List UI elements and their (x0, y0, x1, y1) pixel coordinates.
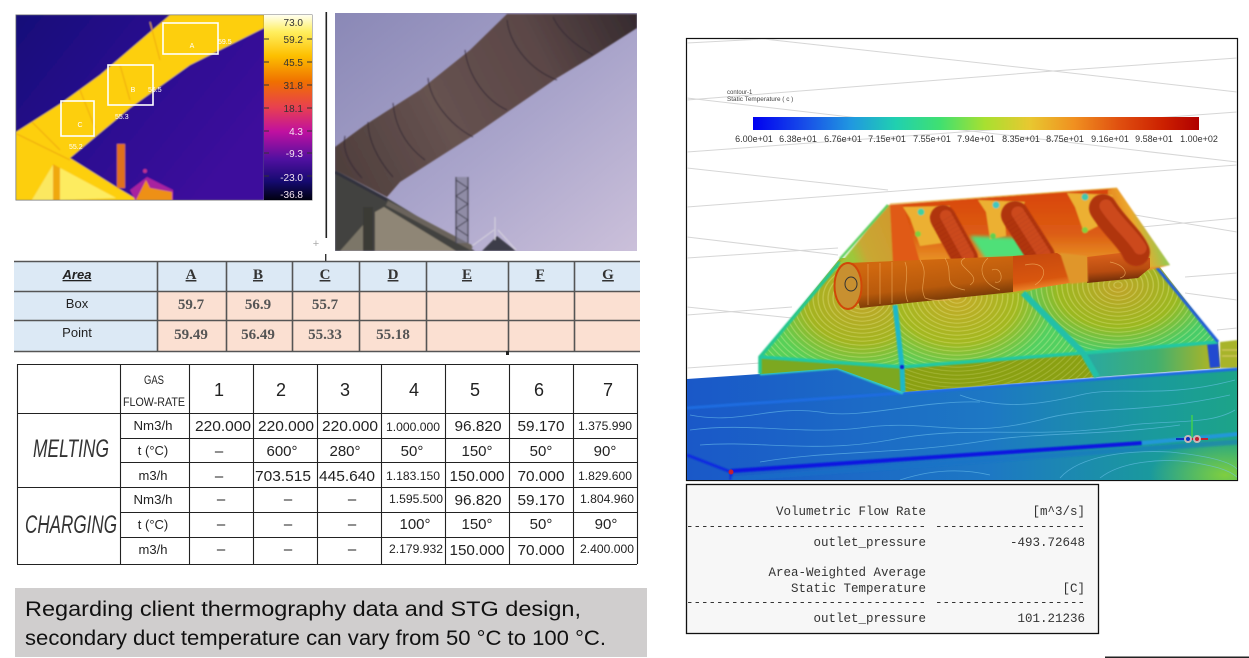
temperature by area table (14, 262, 640, 355)
table 2 header: 2 (276, 380, 286, 400)
row: point: Point (62, 325, 92, 340)
unit labels: Nm3/h (134, 492, 172, 507)
flow values melting: 1.829.600 (578, 469, 632, 483)
measurement box C: C (77, 122, 83, 129)
temperature colour scale: -36.8 (280, 190, 303, 201)
flow values charging: 1.595.500 (389, 492, 443, 506)
table 2 header: FLOW-RATE (123, 395, 185, 409)
solver report panel: -------------------- (935, 596, 1085, 610)
flow values charging: – (348, 516, 357, 533)
table 2 header: 7 (603, 380, 613, 400)
solver report panel: outlet_pressure (813, 612, 926, 626)
row: point: 55.18 (376, 327, 410, 343)
flow values charging (217, 491, 634, 559)
flow values charging: – (348, 541, 357, 558)
temperature colour scale: 59.2 (284, 35, 303, 46)
temperature colour scale: 18.1 (284, 104, 303, 115)
flow values charging: – (217, 541, 226, 558)
lattice tower (456, 177, 468, 243)
solver report panel: [C] (1062, 582, 1085, 596)
solver report panel: -------------------- (935, 520, 1085, 534)
unit labels: t (°C) (138, 517, 168, 532)
measurement box B: B (131, 87, 136, 94)
flow values melting: 150° (461, 443, 493, 460)
solver report panel: Area-Weighted Average (768, 566, 926, 580)
flow values charging: 100° (399, 516, 431, 533)
row: box: 59.7 (178, 297, 205, 313)
vertical divider (326, 12, 327, 238)
flow values melting: 1.000.000 (386, 420, 440, 434)
duct body (335, 14, 637, 197)
row: point (62, 325, 410, 343)
solver report panel: -------------------------------- (686, 596, 926, 610)
table header row: E (462, 267, 472, 283)
solver report panel: 101.21236 (1017, 612, 1085, 626)
flow values melting: 70.000 (518, 468, 564, 485)
axis triad (1176, 415, 1208, 443)
flow values charging: – (284, 516, 293, 533)
flow values charging: – (284, 541, 293, 558)
unit labels: m3/h (139, 542, 167, 557)
hood faces (760, 260, 1218, 367)
table header row: G (602, 267, 614, 283)
temperature colour scale: -23.0 (280, 173, 303, 184)
table 2 header: 5 (470, 380, 480, 400)
flow values charging: 90° (595, 516, 617, 533)
table header row: D (388, 267, 399, 283)
measurement box A: 59.5 (218, 39, 232, 46)
U-bend pipes (943, 213, 1044, 258)
side tab at right edge (1220, 340, 1238, 368)
colour legend: 9.16e+01 (1091, 134, 1129, 144)
measurement box B: 55.3 (115, 114, 129, 121)
flow values charging: – (284, 491, 293, 508)
flow values melting: 1.375.990 (578, 419, 632, 433)
hood structure (760, 258, 1220, 392)
flow values charging: 2.179.932 (389, 542, 443, 556)
tick above table (325, 254, 326, 261)
table 2 header: 6 (534, 380, 544, 400)
solver report panel: [m^3/s] (1032, 505, 1085, 519)
table 2 header: 4 (409, 380, 419, 400)
colour legend: 6.00e+01 (735, 134, 773, 144)
flow values melting: 90° (594, 443, 616, 460)
flow values charging: – (348, 491, 357, 508)
colour legend: 8.35e+01 (1002, 134, 1040, 144)
third U-bend (1103, 206, 1140, 252)
flow values melting: 220.000 (322, 418, 378, 435)
flow values melting (195, 418, 632, 485)
CFD contour panel (686, 38, 1249, 513)
unit labels: t (°C) (138, 443, 168, 458)
table header row: C (320, 267, 330, 283)
flow values melting: 1.183.150 (386, 469, 440, 483)
photo of insulated duct (335, 13, 637, 251)
main duct pipe (834, 206, 1150, 309)
table header row: B (253, 267, 263, 283)
flow values charging: 59.170 (518, 492, 564, 509)
flow values melting: 445.640 (319, 468, 375, 485)
row: point: 56.49 (241, 327, 275, 343)
colour legend: 6.76e+01 (824, 134, 862, 144)
solver report panel: Static Temperature (791, 582, 926, 596)
table header row (62, 267, 614, 283)
flow values melting: 59.170 (518, 418, 564, 435)
thermal image panel (16, 14, 312, 201)
colour legend: 8.75e+01 (1046, 134, 1084, 144)
colour legend: 7.55e+01 (913, 134, 951, 144)
hood lower rim (760, 342, 1220, 392)
table header row: F (535, 267, 545, 283)
unit labels (134, 418, 172, 557)
colour legend: Static Temperature ( c ) (727, 96, 793, 103)
thermography picture (16, 15, 264, 200)
unit labels: Nm3/h (134, 418, 172, 433)
measurement box B: 56.5 (148, 87, 162, 94)
flow values charging: 1.804.960 (580, 492, 634, 506)
table 2 header: GAS (144, 373, 164, 387)
flow values melting: 600° (266, 443, 298, 460)
temperature colour scale: 73.0 (284, 18, 303, 29)
flow values charging: 2.400.000 (580, 542, 634, 556)
measurement box C (61, 101, 94, 151)
colour legend: 7.94e+01 (957, 134, 995, 144)
temperature colour scale: 31.8 (284, 81, 303, 92)
table header row: Area (62, 267, 91, 282)
roof with plenums (838, 188, 1170, 270)
row: box: 55.7 (312, 297, 339, 313)
measurement box B (108, 65, 162, 121)
temperature colour scale: 4.3 (289, 127, 303, 138)
melting label: MELTING (33, 435, 109, 463)
flow values charging: – (217, 516, 226, 533)
row: box: Box (66, 296, 89, 311)
flow values charging: – (217, 491, 226, 508)
flow values melting: 96.820 (454, 418, 502, 435)
conclusion callout: Regarding client thermography data and STG design, (25, 597, 581, 621)
flow values charging: 150.000 (450, 542, 504, 559)
solver report panel: Volumetric Flow Rate (776, 505, 926, 519)
temperature colour scale: -9.3 (286, 149, 303, 160)
table 2 header (123, 373, 613, 409)
flow values melting: 50° (530, 443, 552, 460)
flow values melting: 280° (329, 443, 361, 460)
flow values melting: – (215, 468, 224, 485)
row: point: 55.33 (308, 327, 342, 343)
flow values melting: – (215, 443, 224, 460)
flow values melting: 50° (401, 443, 423, 460)
row: box (66, 296, 339, 313)
flow values melting: 150.000 (450, 468, 504, 485)
flow values charging: 70.000 (518, 542, 564, 559)
unit labels: m3/h (139, 468, 167, 483)
floor duct surface (687, 366, 1237, 480)
flow values melting: 220.000 (195, 418, 251, 435)
colour legend (727, 90, 1218, 144)
gas flow-rate table (17, 364, 638, 564)
row: box: 56.9 (245, 297, 271, 313)
charging label: CHARGING (25, 511, 117, 539)
table 2 header: 3 (340, 380, 350, 400)
conclusion callout (15, 588, 647, 657)
small cross mark: + (313, 238, 319, 250)
colour legend: 7.15e+01 (868, 134, 906, 144)
colour legend: 6.38e+01 (779, 134, 817, 144)
conclusion callout: secondary duct temperature can vary from 50 °C to 100 °C. (25, 626, 606, 650)
building below duct (335, 170, 475, 251)
solver report panel: -493.72648 (1010, 536, 1085, 550)
measurement box C: 55.2 (69, 144, 83, 151)
row: point: 59.49 (174, 327, 208, 343)
flow values charging: 150° (461, 516, 493, 533)
colour legend: 9.58e+01 (1135, 134, 1173, 144)
colour legend: 1.00e+02 (1180, 134, 1218, 144)
table header row: A (186, 267, 197, 283)
solver report panel: outlet_pressure (813, 536, 926, 550)
colour legend: contour-1 (727, 90, 753, 96)
solver report panel (686, 484, 1098, 634)
measurement box A: A (190, 43, 195, 50)
flow values charging: 50° (530, 516, 552, 533)
solver report panel: -------------------------------- (686, 520, 926, 534)
temperature colour scale (264, 15, 312, 201)
temperature colour scale: 45.5 (284, 58, 303, 69)
flow values melting: 220.000 (258, 418, 314, 435)
flow values charging: 96.820 (454, 492, 502, 509)
table 2 header: 1 (214, 380, 224, 400)
flow values melting: 703.515 (255, 468, 311, 485)
measurement box A (163, 23, 232, 54)
